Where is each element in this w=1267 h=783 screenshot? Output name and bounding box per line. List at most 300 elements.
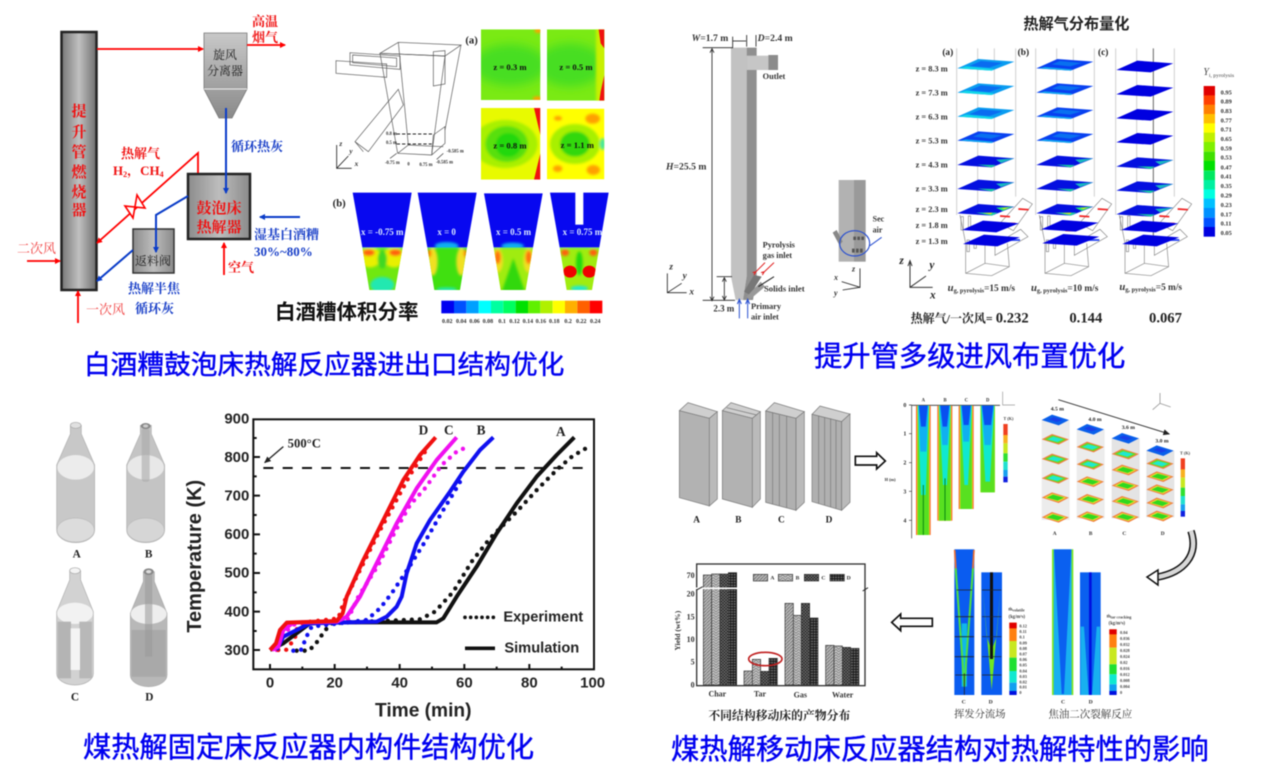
tar cracking contour: C — [1061, 699, 1065, 705]
velocity labels — [948, 282, 1182, 294]
axis break — [696, 586, 737, 591]
bottle C — [57, 568, 93, 703]
red labels: 热解气 — [121, 146, 160, 161]
tar highlight ellipse — [749, 652, 782, 666]
volatile colorbar: 0.08 — [1019, 646, 1028, 651]
caption: product distribution: 不同结构移动床的产物分布 — [708, 708, 850, 722]
panel letters: (b) — [1018, 47, 1029, 58]
contour x=-0.75 m — [353, 193, 412, 293]
panel: circulating fluidized bed process diagram — [17, 14, 319, 323]
secondary air detail: z — [851, 265, 856, 274]
slab column C: C — [1122, 531, 1126, 537]
red labels: H — [113, 163, 123, 178]
wedge D temperature contour: D — [986, 399, 990, 404]
box D: D — [826, 515, 833, 525]
x axis labels: 80 — [521, 674, 538, 691]
labels: Outlet — [763, 72, 786, 81]
volatile colorbar — [1008, 608, 1028, 695]
category labels: Water — [832, 690, 854, 699]
tar cracking colorbar — [1107, 614, 1131, 695]
axes and dimension labels — [337, 132, 464, 168]
contour z=0.8 m: z = 0.8 m — [493, 141, 527, 151]
riser burner column — [62, 32, 96, 290]
colorbar: 0.77 — [1221, 117, 1233, 124]
x axis labels: 20 — [326, 674, 343, 691]
slab column C — [1112, 425, 1140, 537]
tar cracking colorbar: 0.004 — [1120, 684, 1131, 689]
column a planes — [957, 59, 1032, 276]
depth axis: H (m) — [885, 477, 896, 482]
title: bubbling bed: 白酒糟鼓泡床热解反应器进出口结构优化 — [84, 350, 564, 380]
axis titles: Time (min) — [375, 701, 472, 722]
colorbar: 0.71 — [1221, 127, 1232, 134]
blue labels: 循环热灰 — [231, 139, 283, 154]
axes and dimension labels: 0.8 m — [386, 132, 397, 137]
red labels — [17, 14, 278, 317]
legend labels: C — [821, 576, 825, 582]
y ticks: 15 — [687, 612, 695, 621]
colorbar: volume fraction: 0.2 — [564, 319, 572, 325]
bottle C: C — [71, 691, 79, 703]
depth axis — [885, 403, 1000, 538]
reactor wireframe — [336, 42, 461, 159]
slab column B: B — [1089, 531, 1093, 537]
colorbar: volume fraction: 0.14 — [523, 319, 533, 325]
height labels: z = 1.3 m — [916, 237, 948, 246]
colorbar: 0.17 — [1221, 211, 1233, 218]
category labels — [708, 689, 854, 699]
y axis labels: 700 — [224, 487, 249, 504]
axes: z — [898, 255, 904, 267]
colorbar T left: T (K) — [1003, 416, 1014, 421]
axes and dimension labels: 0.5 m — [386, 141, 397, 146]
bars: tar — [744, 658, 777, 685]
y ticks: 0 — [691, 680, 695, 689]
legend: Experiment — [503, 610, 583, 626]
axes and dimension labels: z — [338, 139, 342, 148]
labels: z — [668, 262, 673, 272]
colorbar: i, pyrolysis — [1209, 73, 1234, 79]
colorbar: volume fraction: 0.18 — [549, 319, 559, 325]
colorbar: 0.95 — [1221, 89, 1232, 96]
slab column B — [1077, 417, 1105, 537]
bottle D — [130, 568, 167, 703]
tar cracking colorbar: (kg/m³s) — [1109, 621, 1126, 627]
labels: 2.3 m — [713, 304, 735, 314]
colorbar: 0.41 — [1221, 174, 1232, 181]
red labels: 二次风 — [17, 241, 56, 256]
y ticks: 10 — [687, 635, 695, 644]
plot frame and ticks — [253, 419, 594, 669]
box B — [722, 403, 760, 525]
ratio row — [911, 311, 1182, 327]
velocity labels: u — [1119, 282, 1125, 293]
contour x=0.75 m — [550, 192, 609, 292]
labels: Solids inlet — [764, 284, 805, 294]
volatile colorbar: 0.1 — [1019, 635, 1025, 640]
riser burner column: 器 — [71, 202, 87, 219]
axes: y — [927, 259, 935, 271]
contour x=0: x = 0 — [437, 227, 456, 237]
volatile colorbar: 0.02 — [1019, 680, 1027, 685]
colorbar: 0.05 — [1221, 230, 1232, 237]
chart: temperature vs time — [184, 410, 605, 722]
bottle A — [57, 422, 95, 561]
bars: gas — [785, 603, 818, 685]
riser burner column: 提 — [71, 102, 87, 120]
tar cracking colorbar: 0.024 — [1120, 654, 1131, 659]
bottle A: A — [73, 549, 82, 561]
ratio row: 0.144 — [1069, 311, 1103, 327]
ratio row: 热解气/一次风= 0.232 — [911, 311, 1029, 327]
height labels: z = 3.3 m — [916, 185, 948, 194]
labels: H=25.5 m — [665, 161, 706, 172]
volatile colorbar: ṁ — [1008, 608, 1012, 613]
height labels: z = 1.8 m — [916, 221, 948, 230]
curve labels — [419, 423, 566, 439]
axes — [667, 273, 687, 293]
y axis labels: 300 — [224, 642, 249, 659]
axes and dimension labels: 0 — [407, 162, 410, 167]
wedge C temperature contour: C — [965, 399, 969, 404]
blue labels: 湿基白酒糟 — [254, 227, 319, 242]
slab column A: A — [1053, 531, 1057, 537]
colorbar: volume fraction: 0.04 — [456, 319, 466, 325]
colorbar: 0.65 — [1221, 136, 1232, 143]
tar cracking colorbar: 0 — [1120, 690, 1122, 695]
blue labels — [128, 139, 319, 316]
reference line 500C — [263, 436, 583, 468]
y axis title: Yield (wt%) — [673, 610, 682, 651]
box A: A — [693, 515, 700, 525]
volatile colorbar: 0.05 — [1019, 663, 1027, 668]
y axis labels: 500 — [224, 565, 249, 582]
velocity labels: u — [948, 283, 954, 294]
colorbar: volume fraction: 0.1 — [498, 319, 506, 325]
label (a): (a) — [465, 35, 478, 46]
x axis labels: 100 — [580, 674, 605, 691]
colorbar: volume fraction: 0.02 — [442, 319, 452, 325]
wedge B temperature contour — [937, 399, 952, 521]
volatile colorbar: 0 — [1019, 690, 1022, 695]
bars: char — [703, 573, 737, 685]
colorbar: 0.47 — [1221, 164, 1233, 171]
dimension lines — [703, 35, 756, 301]
contour x=-0.75 m: x = -0.75 m — [361, 227, 404, 237]
blue labels: 循环灰 — [135, 301, 174, 316]
column c planes — [1116, 61, 1192, 276]
title: moving bed: 煤热解移动床反应器结构对热解特性的影响 — [671, 733, 1209, 765]
category labels: Char — [708, 689, 727, 698]
contour x=0.5 m: x = 0.5 m — [496, 227, 532, 237]
volatile contour — [954, 549, 1002, 705]
tar cracking colorbar: 0.028 — [1120, 648, 1131, 653]
y axis labels: 900 — [224, 410, 249, 427]
depth axis: 3 — [903, 489, 906, 495]
blue flow arrows — [97, 108, 300, 281]
red labels: 一次风 — [86, 302, 125, 317]
contour z=1.1 m: z = 1.1 m — [561, 140, 595, 150]
red labels: 高温 — [252, 14, 278, 29]
bars: water — [826, 645, 859, 685]
curve labels: D — [419, 423, 428, 438]
curve labels: C — [444, 423, 454, 438]
volatile colorbar: 0.01 — [1019, 685, 1027, 690]
tar cracking contour — [1052, 549, 1101, 705]
panel: temperature slabs — [1003, 392, 1191, 537]
valve symbol — [125, 195, 145, 218]
category labels: Gas — [794, 690, 807, 699]
depth axis: 1 — [903, 432, 906, 438]
secondary air detail — [833, 180, 885, 298]
slab column A: 4.5 m — [1051, 406, 1064, 412]
tar cracking colorbar: 0.036 — [1120, 636, 1131, 641]
box C — [766, 403, 804, 525]
bubbling bed pyrolyzer: 热解器 — [196, 218, 242, 236]
slab column D: 3.0 m — [1155, 438, 1169, 444]
secondary air detail: x — [833, 273, 838, 282]
contour z=0.3 m: z = 0.3 m — [493, 62, 527, 72]
slab column D — [1146, 438, 1174, 537]
riser burner column: 升 — [71, 124, 87, 141]
block arrow left — [892, 614, 932, 631]
x axis labels: 0 — [266, 674, 274, 691]
colorbar: 0.53 — [1221, 155, 1232, 162]
legend labels: A — [770, 576, 775, 582]
colorbar: volume fraction: 0.24 — [590, 319, 600, 325]
contour z=0.3 m — [480, 28, 542, 101]
height labels — [916, 65, 948, 246]
velocity labels: =5 m/s — [1156, 283, 1182, 293]
panel letters: (a) — [942, 47, 953, 58]
caption: volume fraction: 白酒糟体积分率 — [275, 300, 418, 324]
labels: W=1.7 m — [692, 33, 728, 44]
experiment dotted series — [277, 447, 588, 651]
y axis labels: 400 — [224, 603, 249, 620]
legend — [753, 574, 844, 581]
legend labels: D — [847, 576, 851, 582]
tar cracking colorbar: 0.04 — [1120, 630, 1128, 635]
bubbling bed pyrolyzer: 鼓泡床 — [196, 199, 242, 217]
volatile colorbar: 0.11 — [1019, 629, 1027, 634]
velocity labels: g, pyrolysis — [1037, 287, 1068, 294]
small triad — [1153, 393, 1171, 410]
colorbar T right: T (K) — [1180, 450, 1191, 455]
legend — [465, 610, 583, 656]
wedge D temperature contour — [980, 399, 995, 492]
title: riser: 提升管多级进风布置优化 — [814, 340, 1125, 372]
riser burner column: 烧 — [70, 184, 87, 201]
tar cracking colorbar: 0.012 — [1120, 672, 1130, 677]
volatile colorbar: 0.12 — [1019, 623, 1027, 628]
volatile colorbar: (kg/m³s) — [1009, 614, 1026, 620]
contour x=0.75 m: x = 0.75 m — [563, 227, 603, 237]
height labels: z = 2.3 m — [916, 205, 948, 214]
legend labels — [770, 576, 851, 582]
colorbar: Y — [1203, 67, 1209, 78]
contour z=0.8 m — [472, 108, 540, 180]
y ticks: 5 — [691, 658, 695, 667]
reference line 500C: 500°C — [288, 436, 321, 450]
volatile colorbar: 0.04 — [1019, 668, 1028, 673]
block arrow right — [855, 453, 885, 469]
colorbar: volume fraction: 0.22 — [576, 319, 586, 325]
panel: riser geometry — [665, 33, 885, 321]
tar cracking colorbar: ṁ — [1107, 614, 1111, 619]
axes and dimension labels: -0.585 m — [447, 150, 464, 155]
colorbar: 0.29 — [1221, 192, 1232, 199]
contour z=0.5 m — [546, 28, 606, 102]
labels: air inlet — [751, 312, 779, 321]
curve labels: B — [477, 423, 486, 438]
colorbar T right — [1180, 450, 1191, 517]
bottle D: D — [145, 691, 153, 703]
y axis labels: 600 — [224, 526, 249, 543]
secondary air detail: air — [873, 226, 883, 235]
riser burner column: 管 — [71, 143, 87, 161]
box B: B — [735, 515, 741, 525]
box D — [812, 406, 850, 525]
secondary air detail: y — [833, 289, 838, 298]
axes and dimension labels: -0.585 m — [436, 160, 453, 165]
labels: Primary — [751, 302, 782, 311]
wedge B temperature contour: B — [943, 399, 947, 404]
volatile contour: D — [989, 699, 993, 705]
red labels: 2 — [123, 170, 127, 179]
volatile colorbar: volatile — [1012, 608, 1025, 613]
inlet arrows — [737, 263, 774, 318]
caption: tar cracking: 焦油二次裂解反应 — [1048, 707, 1133, 720]
panel heading: 热解气分布量化 — [1023, 15, 1129, 33]
panel: pyrolysis gas distribution — [898, 15, 1234, 327]
height labels: z = 7.3 m — [916, 89, 948, 98]
panel: moving bed geometry — [679, 399, 1000, 538]
depth axis: 4 — [903, 518, 906, 524]
labels — [665, 33, 805, 321]
red labels: 4 — [160, 170, 164, 179]
colorbar: 0.83 — [1221, 108, 1232, 115]
panel: fixed bed internals bottles — [57, 422, 167, 703]
axes — [898, 255, 936, 301]
slab column D: D — [1161, 531, 1165, 537]
contour x=0 — [418, 193, 477, 292]
labels: Pyrolysis — [763, 241, 796, 250]
colorbar: 0.89 — [1221, 99, 1232, 106]
column b planes — [1036, 59, 1112, 276]
bottle B: B — [145, 549, 153, 561]
tar cracking colorbar: 0.02 — [1120, 660, 1128, 665]
caption: volatile flow field: 挥发分流场 — [954, 707, 1006, 720]
contour x=0.5 m — [484, 193, 543, 292]
height labels: z = 8.3 m — [916, 65, 948, 74]
velocity labels: u — [1031, 283, 1037, 294]
colorbar: volume fraction: 0.16 — [536, 319, 546, 325]
bubbling bed pyrolyzer — [188, 174, 250, 239]
small axes — [1003, 392, 1015, 405]
riser burner column: 燃 — [70, 164, 87, 181]
x axis labels — [266, 674, 605, 691]
volatile colorbar: 0.03 — [1019, 674, 1028, 679]
bar chart: yield — [673, 564, 868, 699]
axis titles — [184, 480, 472, 722]
red flow arrows — [27, 45, 285, 323]
y ticks — [687, 571, 695, 689]
labels: D=2.4 m — [757, 33, 793, 44]
secondary air detail: Sec — [873, 215, 885, 224]
red labels: 烟气 — [251, 30, 278, 45]
legend: Simulation — [504, 640, 579, 656]
tar cracking contour: D — [1089, 699, 1093, 705]
label (b): (b) — [333, 199, 346, 210]
colorbar: 0.59 — [1221, 145, 1232, 152]
labels: gas inlet — [763, 251, 792, 260]
column guide lines — [957, 48, 1174, 237]
axes and dimension labels: -0.75 m — [385, 161, 400, 166]
panel: product yield and flow contours — [673, 549, 1133, 722]
depth axis: 0 — [903, 403, 906, 409]
depth axis: 2 — [903, 460, 906, 466]
y ticks: 20 — [687, 590, 695, 599]
labels: x — [688, 287, 694, 297]
panel letters — [942, 47, 1108, 58]
colorbar: 0.35 — [1221, 183, 1232, 190]
simulation series — [270, 437, 574, 650]
box C: C — [778, 515, 785, 525]
axes and dimension labels: x — [354, 159, 359, 168]
category labels: Tar — [754, 690, 767, 699]
wedge A temperature contour — [916, 399, 931, 535]
axes: x — [929, 289, 936, 301]
return valve: 返料阀 — [135, 253, 171, 268]
wedge C temperature contour — [959, 399, 974, 509]
wedge A temperature contour: A — [922, 399, 926, 404]
panel letters: (c) — [1098, 47, 1108, 58]
tar cracking colorbar: tar cracking — [1111, 614, 1131, 619]
cyclone separator: 分离器 — [207, 63, 243, 78]
contour z=1.1 m — [547, 109, 605, 179]
y axis labels: 800 — [224, 449, 249, 466]
velocity labels: =15 m/s — [984, 284, 1015, 294]
curve labels: A — [556, 424, 566, 439]
colorbar T left — [1003, 416, 1014, 482]
colorbar: volume fraction: 0.06 — [469, 319, 480, 325]
title: fixed bed: 煤热解固定床反应器内构件结构优化 — [83, 731, 534, 763]
y axis labels — [224, 410, 249, 659]
height labels: z = 5.3 m — [916, 136, 948, 145]
volatile colorbar: 0.09 — [1019, 640, 1027, 645]
velocity labels: =10 m/s — [1067, 284, 1099, 294]
bottle B — [127, 423, 165, 561]
cyclone separator: 旋风 — [213, 47, 237, 62]
tar cracking colorbar: 0.008 — [1120, 678, 1131, 683]
volatile colorbar: 0.07 — [1019, 652, 1028, 657]
colorbar: volume fraction: 0.08 — [483, 319, 493, 325]
height labels: z = 4.3 m — [916, 161, 948, 170]
slab column A — [1042, 406, 1070, 537]
labels: y — [682, 272, 688, 282]
axis titles: Temperature (K) — [184, 480, 206, 633]
y ticks: 70 — [687, 571, 695, 580]
panel: distiller grains volume fraction contours — [333, 27, 609, 325]
axes and dimension labels: 0.75 m — [419, 163, 433, 168]
red labels: ，CH — [127, 163, 160, 179]
colorbar: 0.11 — [1221, 221, 1231, 228]
height labels: z = 6.3 m — [916, 113, 948, 122]
volatile colorbar: 0.06 — [1019, 657, 1028, 662]
velocity labels: g, pyrolysis — [954, 287, 985, 294]
contour z=0.5 m: z = 0.5 m — [559, 62, 593, 72]
riser tower — [731, 48, 778, 300]
